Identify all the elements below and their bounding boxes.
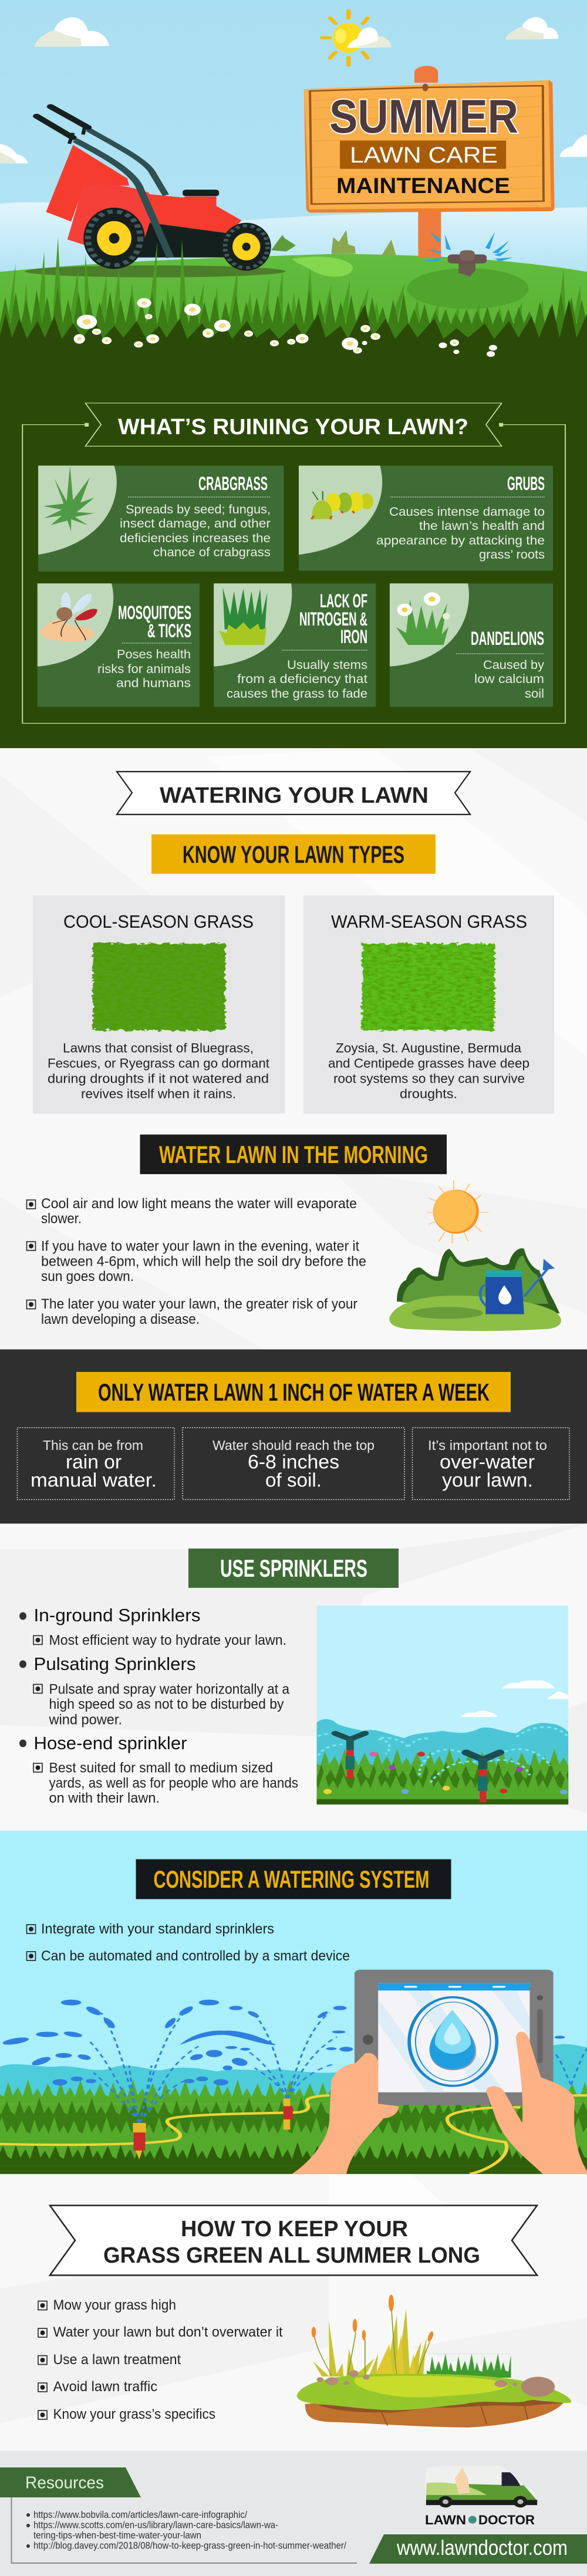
note: don't over-water: It’s important not to — [428, 1438, 547, 1453]
text: sprinkler types: Most efficient way to hydrate your lawn. — [49, 1632, 286, 1648]
text: lack of nitrogen and iron: Usually stems — [287, 658, 367, 672]
text: crabgrass: insect damage, and other — [120, 516, 271, 530]
text: resource links: https://www.bobvila.com/articles/lawn-care-infographic/ — [33, 2509, 247, 2520]
banner: how to keep your grass green — [50, 2205, 537, 2276]
text: morning watering bullets: slower. — [41, 1211, 82, 1226]
text: watering system bullets: Integrate with your standard sprinklers — [41, 1921, 274, 1937]
text: crabgrass: chance of crabgrass — [153, 545, 271, 559]
text: sprinkler types: yards, as well as for people who are hands — [49, 1776, 298, 1791]
text: resource links: https://www.scotts.com/en-us/library/lawn-care-basics/lawn-wa- — [33, 2520, 278, 2530]
note: rain or manual water: This can be from — [43, 1438, 143, 1453]
text: sprinkler types: Best suited for small to medium sized — [49, 1760, 273, 1776]
frame around section — [22, 425, 565, 724]
logo: lawn doctor: LAWN — [425, 2513, 466, 2527]
card: nitrogen background — [214, 583, 376, 706]
text: morning watering bullets: between 4-6pm, which will help the soil dry before the — [41, 1253, 366, 1270]
text: crabgrass — [120, 473, 271, 559]
icon: cloud right edge — [559, 134, 587, 157]
note: rain or manual water: rain or — [66, 1451, 122, 1473]
icon: tall thin grass blades — [8, 237, 581, 321]
description: droughts. — [400, 1087, 457, 1101]
text: dandelions: low calcium — [474, 672, 544, 686]
text: lack of nitrogen and iron: IRON — [340, 626, 367, 647]
heading box — [76, 1372, 511, 1412]
text: watering system bullets — [27, 1921, 350, 1964]
text: sprinkler types: Hose-end sprinkler — [34, 1733, 187, 1753]
resources tab: Resources — [25, 2474, 104, 2493]
text: morning watering bullets — [27, 1196, 366, 1327]
heading: WATERING YOUR LAWN — [160, 783, 429, 808]
icon: sun, bushes and watering can — [389, 1181, 561, 1331]
text: mosquitoes and ticks: risks for animals — [97, 662, 191, 676]
heading box: know your lawn types: KNOW YOUR LAWN TYPES — [183, 840, 404, 868]
text: lack of nitrogen and iron: NITROGEN & — [299, 608, 367, 630]
heading: GRASS GREEN ALL SUMMER LONG — [103, 2243, 480, 2268]
text: sprinkler types: Pulsating Sprinklers — [34, 1654, 196, 1674]
text: lack of nitrogen and iron: LACK OF — [320, 590, 367, 611]
text: grubs: appearance by attacking the — [376, 533, 545, 547]
description: Zoysia, St. Augustine, Bermuda — [336, 1041, 522, 1055]
logo: lawn doctor: DOCTOR — [478, 2513, 535, 2527]
text: lawn tips: Know your grass’s specifics — [53, 2406, 215, 2422]
text: mosquitoes and ticks: Poses health — [117, 647, 191, 661]
heading box: use sprinklers: USE SPRINKLERS — [220, 1554, 367, 1582]
icon: background tufts — [271, 230, 396, 255]
icon: cloud left edge — [0, 144, 28, 163]
text: resource links — [26, 2509, 346, 2551]
text: sprinkler types: wind power. — [49, 1712, 122, 1728]
text: lawn tips: Mow your grass high — [53, 2297, 176, 2313]
description: and Centipede grasses have deep — [328, 1056, 529, 1070]
banner ribbon — [85, 403, 502, 446]
icon: mower shadow — [25, 265, 286, 278]
icon: cloud top right — [505, 17, 559, 39]
description — [48, 1041, 269, 1101]
description: Fescues, or Ryegrass can go dormant — [48, 1056, 269, 1070]
description: root systems so they can survive — [333, 1071, 525, 1086]
icon: wooden sign — [304, 80, 555, 212]
text: sprinkler types: In-ground Sprinklers — [34, 1605, 201, 1625]
note: don't over-water: over-water — [440, 1451, 535, 1473]
text: mosquitoes and ticks: & TICKS — [147, 620, 191, 641]
icon: grub caterpillar — [312, 491, 373, 519]
text: lack of nitrogen and iron: from a deficiency that — [237, 672, 367, 686]
panel: use sprinklers — [0, 1523, 587, 1831]
heading box: CONSIDER A WATERING SYSTEM — [154, 1865, 430, 1893]
text: morning watering bullets: sun goes down. — [41, 1269, 134, 1284]
text: lawn tips — [38, 2297, 283, 2422]
note: rain or manual water: manual water. — [31, 1469, 157, 1490]
text: mosquitoes and ticks — [97, 602, 191, 690]
note: 6-8 inches of soil — [183, 1428, 404, 1500]
text: sprinkler types: on with their lawn. — [49, 1790, 160, 1806]
heading box: water lawn in the morning: WATER LAWN IN THE MORNING — [159, 1141, 428, 1168]
text: grubs: grass’ roots — [479, 547, 545, 562]
card: dandelions background — [390, 583, 553, 706]
text: grubs: the lawn’s health and — [419, 519, 545, 533]
heading: COOL-SEASON GRASS — [63, 911, 254, 932]
icon: lawn layers — [0, 2080, 587, 2206]
description: during droughts if it not watered and — [48, 1071, 269, 1086]
text: crabgrass: CRABGRASS — [198, 473, 268, 494]
icon: dandelions — [396, 592, 450, 645]
heading box — [136, 1859, 451, 1899]
grass swatch — [362, 944, 495, 1030]
text: watering system bullets: Can be automated and controlled by a smart device — [41, 1948, 350, 1964]
heading: HOW TO KEEP YOUR — [181, 2217, 408, 2242]
icon: garden grass rows — [317, 1749, 568, 1804]
hill: lawn ground — [0, 254, 587, 376]
resources frame — [12, 2497, 357, 2563]
illustration: sprinkler lawn and tablet — [0, 1969, 587, 2174]
text: lack of nitrogen and iron — [227, 590, 367, 701]
grass swatch — [93, 944, 225, 1030]
text: dandelions: soil — [525, 687, 544, 701]
heading — [103, 2217, 480, 2268]
icon: mid grass blades — [0, 288, 587, 376]
panel: cool-season grass — [33, 895, 285, 1114]
panel: what's ruining your lawn — [0, 376, 587, 748]
panel: hero scene — [0, 0, 587, 376]
text: lack of nitrogen and iron: causes the grass to fade — [227, 687, 367, 701]
text: morning watering bullets: Cool air and low light means the water will evaporate — [41, 1196, 357, 1212]
title: Maintenance: MAINTENANCE — [336, 174, 510, 198]
text: lawn tips: Use a lawn treatment — [53, 2352, 181, 2368]
heading: what's ruining your lawn: WHAT’S RUINING YOUR LAWN? — [118, 415, 468, 440]
heading: WARM-SEASON GRASS — [331, 911, 527, 932]
heading box: know your lawn types — [151, 834, 436, 874]
icon: sprinkler heads — [133, 2098, 293, 2159]
text: lawn tips: Water your lawn but don’t overwater it — [53, 2324, 283, 2340]
text: sprinkler types — [19, 1605, 298, 1806]
text: resource links: tering-tips-when-best-time-water-your-lawn — [33, 2530, 201, 2541]
resources tab — [0, 2467, 141, 2497]
panel: watering your lawn — [0, 748, 587, 1350]
text: grubs: GRUBS — [507, 473, 545, 494]
text: mosquitoes and ticks: MOSQUITOES — [118, 602, 191, 623]
icon: dark grass foreground — [0, 299, 587, 376]
panel: footer — [0, 2450, 587, 2576]
icon: lawn mower — [36, 107, 271, 271]
panel: keep your grass green — [0, 2174, 587, 2451]
title: Summer: SUMMER — [329, 90, 518, 143]
icon: crabgrass — [43, 465, 95, 531]
icon: daisies — [74, 298, 497, 357]
description — [328, 1041, 529, 1101]
note: don't over-water — [412, 1428, 569, 1500]
icon: hands holding tablet — [292, 2031, 587, 2174]
logo: lawn doctor — [425, 2513, 535, 2527]
icon: tablet — [355, 1970, 554, 2105]
icon: cloud left — [35, 17, 109, 47]
text: sprinkler types: Pulsate and spray water horizontally at a — [49, 1682, 290, 1697]
panel: warm-season grass — [303, 895, 554, 1114]
text: dandelions — [456, 628, 544, 701]
banner: watering your lawn — [117, 772, 470, 814]
text: morning watering bullets: The later you water your lawn, the greater risk of your — [41, 1296, 357, 1312]
panel: consider a watering system — [0, 1831, 587, 2206]
heading box: water lawn in the morning — [140, 1135, 447, 1174]
text: lawn tips: Avoid lawn traffic — [53, 2379, 157, 2395]
note: 6-8 inches of soil: 6-8 inches — [248, 1451, 339, 1473]
icon: sprinkler and mound — [407, 232, 529, 309]
icon: lawn doctor van — [425, 2466, 538, 2524]
icon: mosquito on skin — [41, 592, 97, 641]
icon: sun — [322, 11, 391, 65]
note: rain or manual water — [18, 1428, 174, 1500]
text: crabgrass: Spreads by seed; fungus, — [126, 502, 271, 516]
panel: only water lawn 1 inch a week — [0, 1350, 587, 1524]
note: don't over-water: your lawn. — [442, 1469, 533, 1490]
icon: yellow hose — [0, 2095, 587, 2174]
text: grubs: Causes intense damage to — [389, 505, 545, 519]
text: morning watering bullets: lawn developing a disease. — [41, 1311, 200, 1327]
description: revives itself when it rains. — [81, 1087, 236, 1101]
text: dandelions: Caused by — [483, 658, 544, 672]
title: Lawn Care: LAWN CARE — [350, 143, 498, 168]
heading box: use sprinklers — [188, 1549, 399, 1588]
text: sprinkler types: high speed so as not to be disturbed by — [49, 1696, 284, 1712]
text: grubs — [376, 473, 545, 562]
icon: fading grass — [219, 587, 267, 645]
description: Lawns that consist of Bluegrass, — [63, 1041, 254, 1055]
icon: water spray — [90, 2009, 587, 2123]
icon: sign post — [414, 66, 441, 258]
text: resource links: http://blog.davey.com/2018/08/how-to-keep-grass-green-in-hot-summer-weather/ — [33, 2540, 346, 2551]
card: crabgrass background — [38, 465, 284, 572]
illustration: grass island — [297, 2294, 572, 2428]
text: mosquitoes and ticks: and humans — [116, 676, 191, 690]
text: morning watering bullets: If you have to water your lawn in the evening, water it — [41, 1238, 359, 1255]
note: 6-8 inches of soil: Water should reach the top — [212, 1438, 375, 1453]
card: mosquitoes background — [38, 583, 200, 706]
note: 6-8 inches of soil: of soil. — [265, 1469, 322, 1490]
text: crabgrass: deficiencies increases the — [120, 531, 271, 545]
illustration: sprinklers in garden — [317, 1605, 568, 1805]
card: grubs background — [299, 465, 553, 571]
